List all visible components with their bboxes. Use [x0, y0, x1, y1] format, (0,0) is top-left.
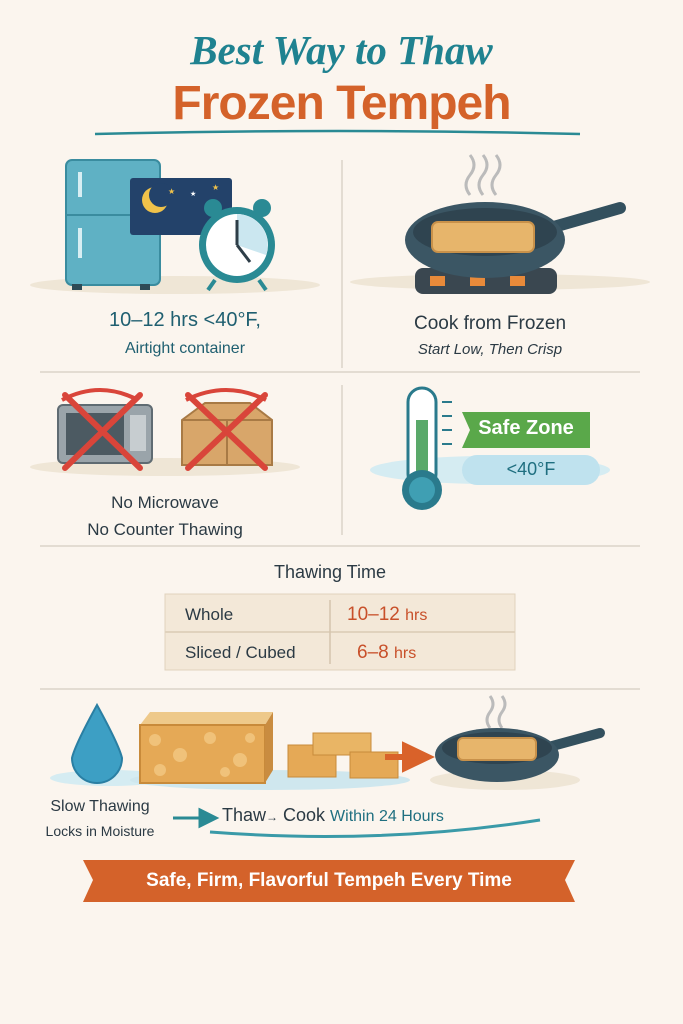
table text: 10–12 hrs: [347, 604, 427, 625]
text: <40°F: [507, 459, 555, 479]
table text: Sliced / Cubed: [185, 643, 296, 662]
text: fridge: 10–12 hrs <40°F,: [109, 309, 261, 331]
heading: thawing time: Thawing Time: [274, 562, 386, 582]
text: slow thawing: [46, 798, 154, 839]
icon: tempeh block and cubes: [130, 712, 410, 790]
title underline: [95, 131, 580, 134]
table text: [185, 604, 427, 663]
banner text: Safe, Firm, Flavorful Tempeh Every Time: [146, 870, 512, 891]
banner: [83, 860, 575, 902]
icon: fridge, night, clock: ★: [212, 183, 219, 192]
label: safe zone: Safe Zone: [478, 417, 574, 439]
table text: 6–8 hrs: [357, 642, 416, 663]
text: no microwave: No Counter Thawing: [87, 520, 243, 539]
icon: pan on burner: [350, 155, 650, 294]
title line 1: Best Way to Thaw: [190, 27, 493, 73]
arrow: to pan: [385, 746, 428, 768]
icon: fridge, night, clock: ★: [190, 190, 196, 198]
arrow: thaw: [173, 810, 540, 836]
table: [165, 594, 515, 670]
text: thaw cook: Thaw→ Cook Within 24 Hours: [222, 805, 444, 825]
text: slow thawing: Locks in Moisture: [46, 823, 154, 839]
text: no microwave: [87, 493, 243, 539]
text: no microwave: No Microwave: [111, 493, 219, 512]
icon: water drop: [50, 705, 170, 786]
table text: Whole: [185, 605, 233, 624]
icon: fridge, night, clock: ★: [168, 187, 175, 196]
icon: thermometer safe zone: [370, 388, 610, 510]
icon: fridge, night, clock: [30, 160, 320, 294]
text: cook from frozen: Cook from Frozen: [414, 313, 566, 334]
icon: microwave and counter crossed: [30, 390, 300, 476]
text: Start Low, Then Crisp: [418, 341, 562, 358]
text: slow thawing: Slow Thawing: [50, 798, 150, 815]
text: Airtight container: [125, 340, 245, 357]
icon: pan bottom: [430, 696, 600, 790]
title line 2: Frozen Tempeh: [172, 77, 511, 130]
